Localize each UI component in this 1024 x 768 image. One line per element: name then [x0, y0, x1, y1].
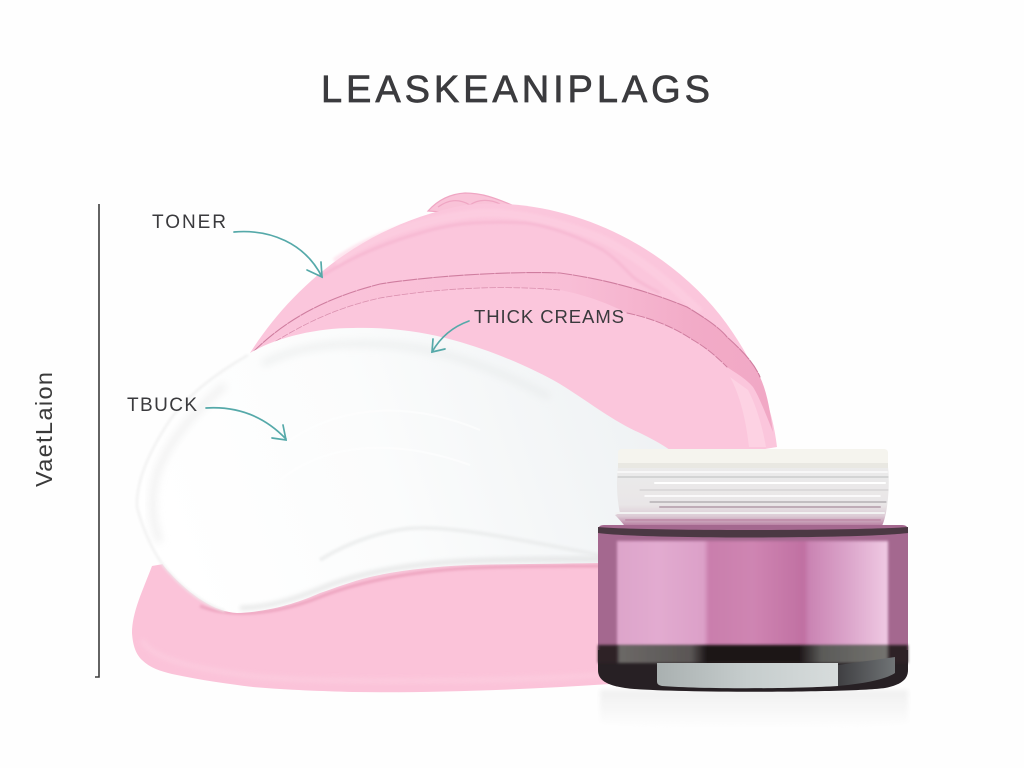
jar lid rim [618, 449, 888, 468]
raised rim band highlight [335, 213, 700, 312]
bottom lip underside [240, 559, 610, 608]
outer left edge tone [137, 355, 248, 611]
arrow: thuck [206, 408, 286, 440]
arrow: thick creams [432, 321, 469, 352]
upper pink cream swatch [250, 193, 777, 470]
jar base [598, 650, 908, 692]
label: thuck: TBUCK [127, 395, 197, 416]
base upper band [598, 645, 908, 663]
white thick cream swatch [137, 328, 670, 613]
label: toner [152, 212, 322, 277]
seam stitching [252, 273, 760, 377]
neck threads [616, 472, 888, 520]
label: toner: TONER [152, 212, 226, 233]
top lip shading [262, 344, 550, 397]
cream texture [280, 411, 480, 480]
arrow: toner [234, 232, 322, 277]
icon: cosmetic jar [598, 449, 908, 692]
lower pink cream swatch [132, 540, 620, 692]
knot at top of swatch [428, 193, 512, 214]
title: LEASKEANIPLAGS [321, 69, 710, 111]
vertical axis line [95, 204, 99, 677]
lower swatch edge highlight [142, 640, 600, 681]
swatch contact shadow [200, 566, 610, 613]
axis label: VaetLaion [31, 372, 57, 487]
lower right fold highlight [730, 377, 766, 447]
jar body outer [598, 525, 908, 660]
jar liquid [617, 541, 888, 646]
label: thick creams: THICK CREAMS [474, 306, 624, 327]
jar shadow [600, 690, 908, 728]
label: thuck [127, 395, 286, 440]
jar neck [615, 467, 889, 530]
base glass [657, 663, 838, 688]
jar shoulder [598, 527, 908, 538]
label: thick creams [432, 306, 624, 352]
stitched seam band [252, 273, 773, 432]
left lip shading [153, 385, 225, 542]
bottom lip line [320, 528, 600, 560]
raised rim band shadow [320, 222, 660, 293]
